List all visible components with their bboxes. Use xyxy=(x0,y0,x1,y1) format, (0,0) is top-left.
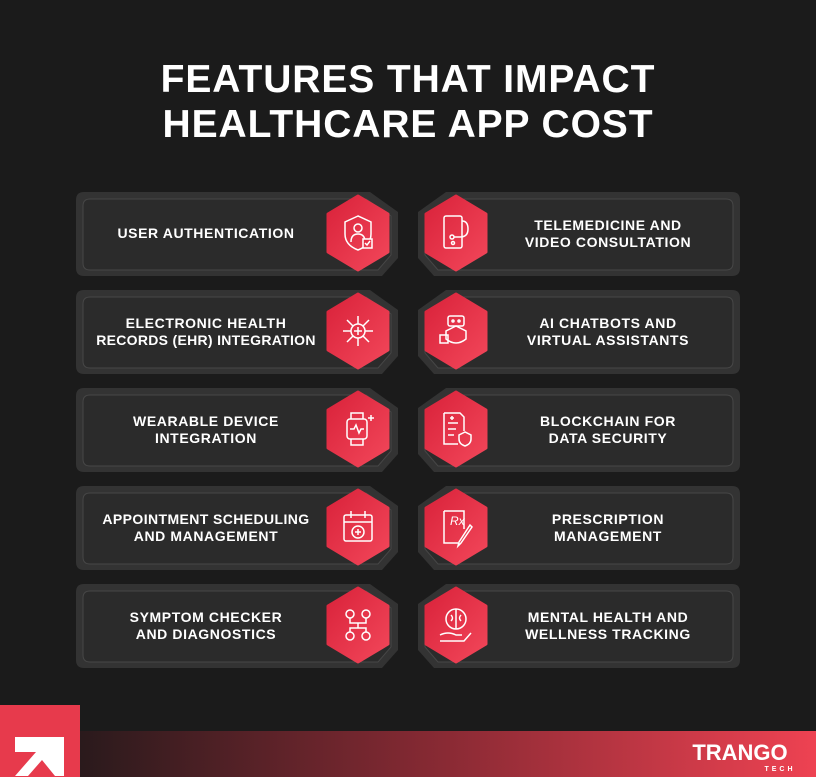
panel: telemedicine xyxy=(418,192,740,276)
panel: blockchain: DATA SECURITY xyxy=(549,430,667,446)
panel: blockchain xyxy=(418,388,740,472)
icon: brain hand xyxy=(426,588,486,662)
panel: AI chatbots: AI CHATBOTS AND xyxy=(539,315,677,331)
panel: AI chatbots xyxy=(418,290,740,374)
panel: symptom checker xyxy=(76,584,398,668)
icon: calendar xyxy=(328,490,388,564)
panel: wearable: WEARABLE DEVICE xyxy=(133,413,279,429)
icon: robot xyxy=(426,294,486,368)
panel: AI chatbots: VIRTUAL ASSISTANTS xyxy=(527,332,689,348)
icon: shield user xyxy=(328,196,388,270)
logo: trango tech: TECH xyxy=(764,766,796,773)
panel: blockchain: BLOCKCHAIN FOR xyxy=(540,413,676,429)
icon: document shield xyxy=(426,392,486,466)
panel: telemedicine: VIDEO CONSULTATION xyxy=(525,234,691,250)
icon: phone stethoscope xyxy=(426,196,486,270)
panel: prescription xyxy=(418,486,740,570)
footer gradient bar xyxy=(80,731,816,777)
panel: prescription: PRESCRIPTION xyxy=(552,511,664,527)
title: HEALTHCARE APP COST xyxy=(163,103,653,146)
icon: prescription xyxy=(426,490,486,564)
panel: mental health xyxy=(418,584,740,668)
logo: trango tech: TRANGO xyxy=(692,740,788,765)
panel: EHR: RECORDS (EHR) INTEGRATION xyxy=(96,332,316,348)
panel: wearable: INTEGRATION xyxy=(155,430,257,446)
panel: user authentication: USER AUTHENTICATION xyxy=(117,225,295,241)
icon: diagnostics nodes xyxy=(328,588,388,662)
panel: EHR xyxy=(76,290,398,374)
panel: symptom checker: SYMPTOM CHECKER xyxy=(130,609,282,625)
logo mark xyxy=(0,705,80,777)
panel: appointment xyxy=(76,486,398,570)
title xyxy=(161,58,655,146)
logo: trango tech xyxy=(692,740,796,773)
panel: wearable xyxy=(76,388,398,472)
title: FEATURES THAT IMPACT xyxy=(161,58,655,101)
icon: smartwatch xyxy=(328,392,388,466)
panel: symptom checker: AND DIAGNOSTICS xyxy=(136,626,276,642)
panel: appointment: AND MANAGEMENT xyxy=(134,528,278,544)
icon: prescription: Rx xyxy=(450,514,466,528)
panel: telemedicine: TELEMEDICINE AND xyxy=(534,217,682,233)
panel: appointment: APPOINTMENT SCHEDULING xyxy=(102,511,310,527)
icon: network xyxy=(328,294,388,368)
panel: mental health: MENTAL HEALTH AND xyxy=(528,609,688,625)
panel: mental health: WELLNESS TRACKING xyxy=(525,626,691,642)
panel: EHR: ELECTRONIC HEALTH xyxy=(126,315,286,331)
panel: prescription: MANAGEMENT xyxy=(554,528,662,544)
panel: user authentication xyxy=(76,192,398,276)
